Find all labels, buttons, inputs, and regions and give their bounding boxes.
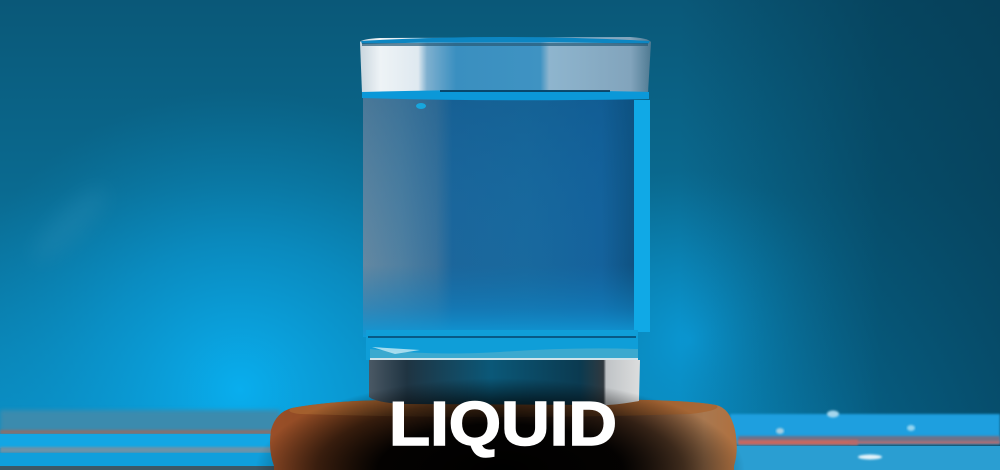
glass rim and empty upper section xyxy=(360,37,651,93)
glass bottom with refraction xyxy=(366,330,638,360)
water body xyxy=(363,97,634,335)
painted table surface xyxy=(0,410,1000,470)
dark vignette behind title xyxy=(255,378,745,470)
wooden coaster xyxy=(270,400,737,470)
water surface line xyxy=(362,90,649,100)
glass of blue liquid xyxy=(360,37,651,405)
title: LIQUID xyxy=(389,390,617,459)
solid glass base xyxy=(369,360,640,405)
